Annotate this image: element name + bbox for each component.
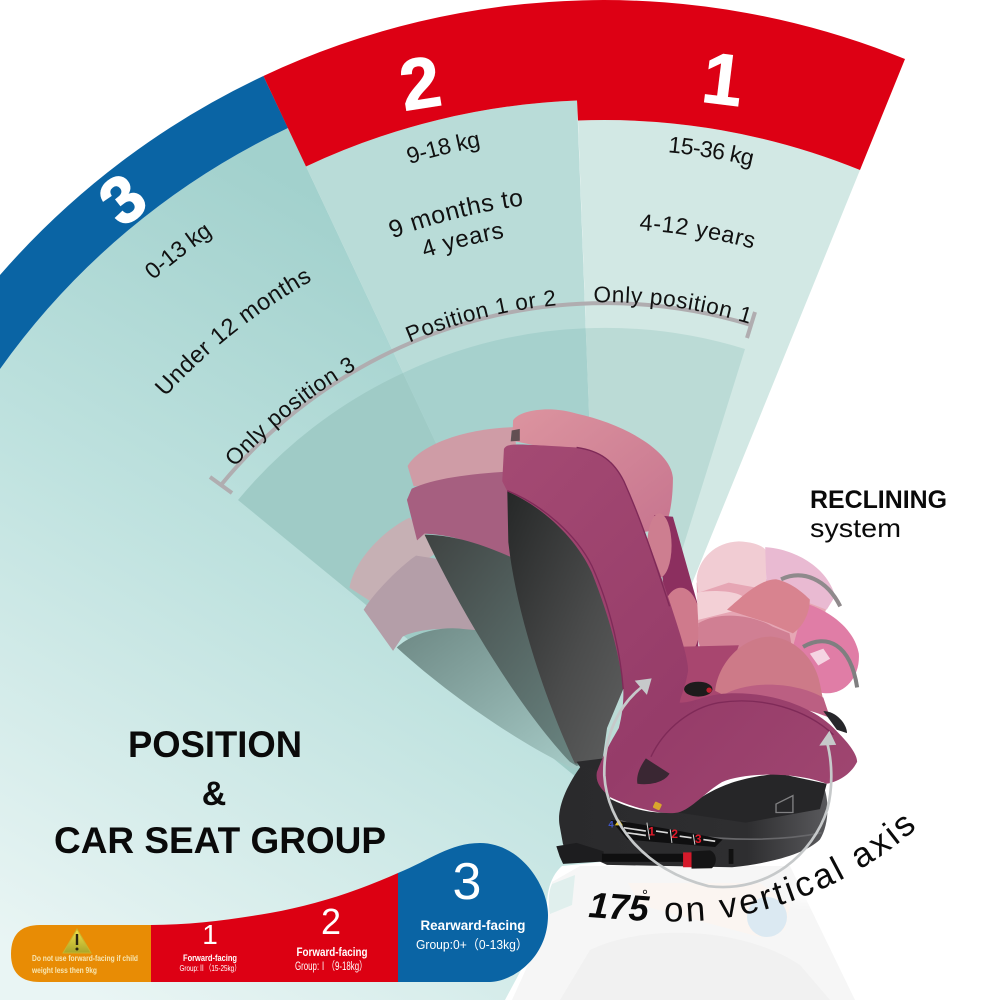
seat: base — [556, 758, 828, 869]
warning text — [31, 954, 138, 975]
group 3 text: Group:0+（0-13kg） — [416, 937, 528, 952]
inner fan: position 3 sector — [238, 373, 604, 800]
band number 3: 3 — [85, 159, 160, 240]
seat: base: 2 — [671, 827, 678, 841]
band number 1: 1 — [698, 38, 748, 122]
seat: headrest — [512, 409, 673, 532]
group 2 labels — [389, 134, 556, 342]
seat: yellow tag — [653, 801, 662, 811]
reclining system label — [810, 486, 947, 543]
group 1 labels: 4-12 years — [640, 214, 754, 248]
title: position and car seat group: & — [202, 775, 226, 813]
group 2 text — [295, 901, 368, 973]
group 3 labels: Under 12 months — [154, 271, 310, 394]
group 3 labels — [146, 224, 354, 464]
panel: teal fan background for position 3 — [0, 128, 604, 1000]
group 1 text: Forward-facing — [183, 953, 237, 963]
seat: fabric side panel and cushion — [502, 445, 857, 813]
seat: base: 1 — [648, 824, 655, 838]
group 2 text: 2 — [321, 901, 341, 942]
band number 2: 2 — [394, 41, 446, 127]
group 1 labels: Only position 1 — [594, 286, 749, 324]
panel: teal fan for group 2 — [306, 100, 604, 800]
rotation arrow curve — [604, 684, 831, 887]
faint seat reflection below base — [512, 866, 855, 1000]
warning text: weight less then 9kg — [31, 966, 97, 975]
seat: base: 4 — [608, 819, 614, 830]
group 1 text — [180, 919, 240, 973]
ghost seat: middle reclined position — [407, 427, 597, 766]
group 2 labels: 4 years — [424, 226, 504, 256]
title: position and car seat group: POSITION — [128, 724, 302, 765]
car seat: main upright position with side view — [502, 409, 859, 887]
reclining system label: system — [810, 513, 901, 543]
position bracket arc — [210, 303, 755, 493]
title: position and car seat group: CAR SEAT GROUP — [54, 820, 386, 861]
banner: blue segment group 3 — [398, 843, 548, 982]
seat: base: 3 — [695, 832, 702, 846]
group 2 text: Forward-facing — [296, 947, 368, 959]
rotation caption: on vertical axis: on vertical axis — [666, 816, 914, 922]
banner: red segment group 1 — [151, 913, 270, 982]
group 3 labels: 0-13 kg — [146, 224, 212, 278]
group 1 text: 1 — [202, 919, 218, 950]
seat: black shell — [507, 491, 623, 763]
group 3 labels: Only position 3 — [226, 358, 354, 464]
warning text: Do not use forward-facing if child — [32, 954, 138, 963]
seat: armrest dark opening — [637, 758, 670, 784]
group 3 text: Rearward-facing — [420, 918, 526, 933]
banner: red segment group 2 — [270, 873, 398, 982]
bottom banner: group key — [11, 843, 548, 982]
white fade over base corner — [790, 790, 880, 900]
group 2 text: Group:Ⅰ（9-18kg） — [295, 960, 367, 973]
group 2 labels: Position 1 or 2 — [405, 290, 556, 342]
group 3 text — [416, 853, 528, 952]
inner fan: position 1 sector — [586, 328, 745, 800]
group 1 labels: 15-36 kg — [670, 137, 754, 170]
group 1 text: Group:Ⅱ（15-25kg） — [180, 963, 240, 973]
rotation arrowhead top — [635, 678, 652, 695]
headrest pegs — [511, 429, 520, 441]
icon: warning triangle — [63, 929, 91, 953]
panel: teal fan for group 1 — [578, 120, 860, 800]
group 3 text: 3 — [453, 853, 481, 911]
rotation caption: 175 degrees: ° — [642, 887, 648, 904]
red header band: groups 2 and 1 — [263, 0, 905, 170]
group 2 labels: 9 months to — [389, 192, 522, 237]
rotation caption: 175 degrees: 175 — [587, 884, 651, 929]
blue header band: group 3 — [0, 76, 288, 369]
group 1 labels — [594, 137, 754, 324]
banner: orange warning segment — [11, 925, 151, 982]
rotation arrowhead right — [819, 731, 836, 746]
title: position and car seat group — [54, 724, 386, 861]
seat: back pad — [661, 588, 700, 659]
seat: back column — [654, 515, 698, 657]
seat: fabric seams — [507, 447, 833, 757]
seat: lower headrest pad — [647, 513, 672, 578]
seat: upper front headrest lobes faded — [697, 541, 840, 660]
inner fan: position 2 sector — [403, 328, 604, 800]
seat: side wings and pads in forward direction — [675, 579, 859, 733]
reclining system label: RECLINING — [810, 486, 947, 514]
group 2 labels: 9-18 kg — [407, 134, 480, 163]
ghost seat: furthest reclined position — [349, 518, 590, 769]
